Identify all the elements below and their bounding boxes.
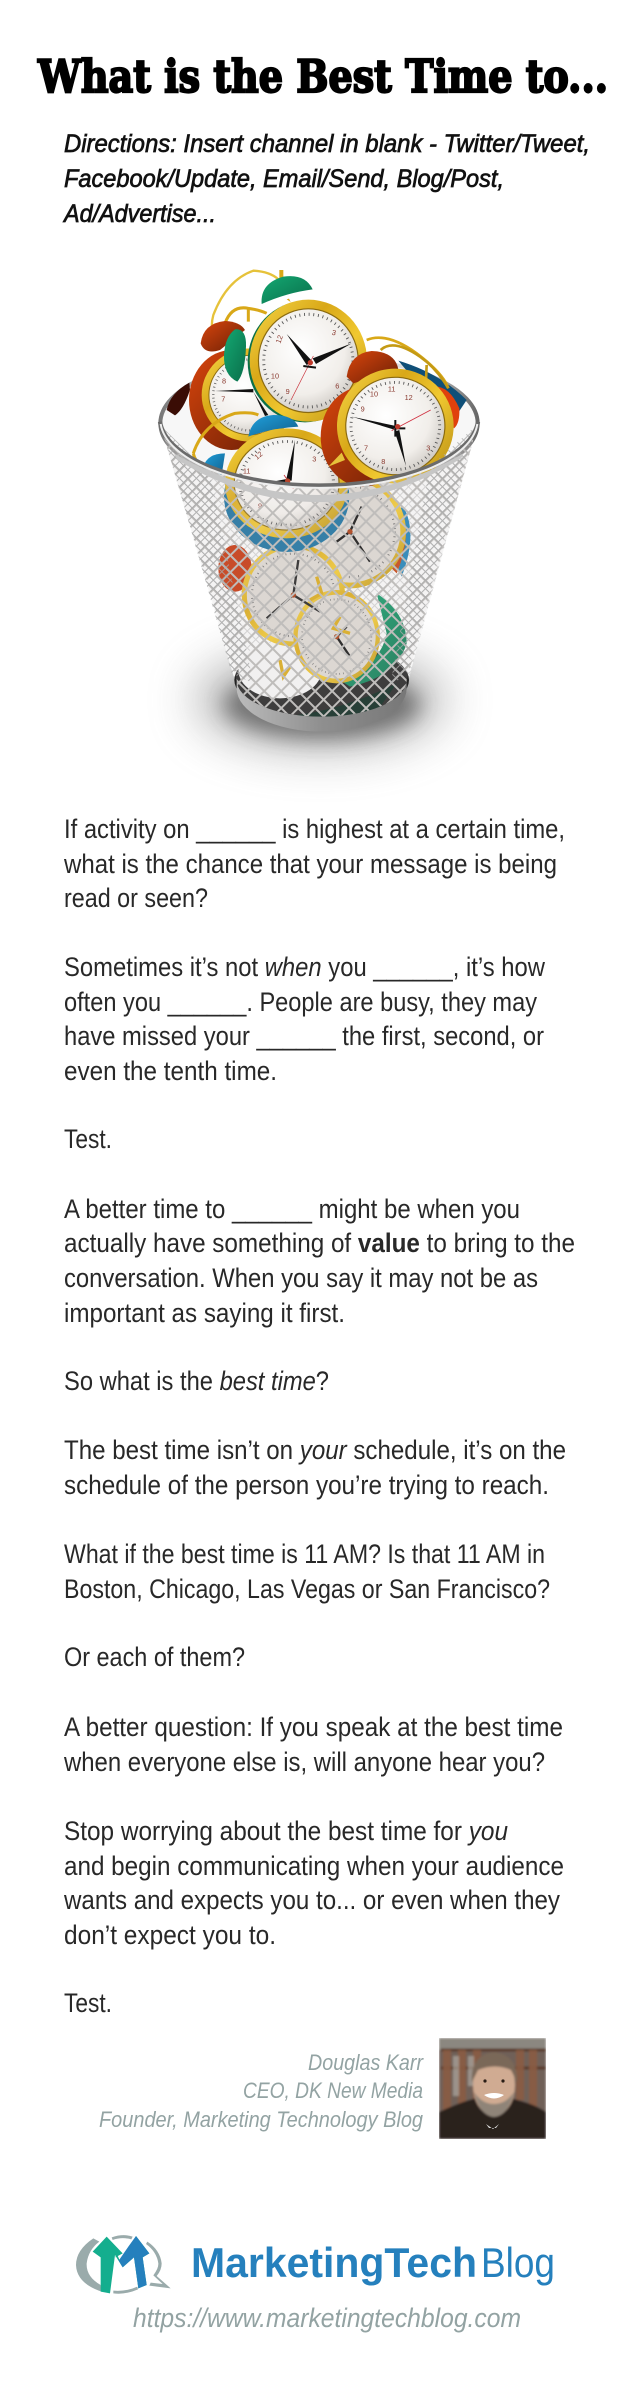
body copy: [63, 814, 575, 2018]
paragraph: how often: even the tenth time.: [64, 1056, 277, 1086]
paragraph: better time: actually have something of value to bring to the: [64, 1228, 575, 1258]
basket interior: [159, 359, 478, 730]
right clock: 8: [381, 457, 385, 466]
paragraph: stop worrying: wants and expects you to... or even when they: [63, 1885, 560, 1915]
logo: [76, 2235, 555, 2294]
logo wordmark: MarketingTech: [191, 2239, 477, 2286]
front clock inside basket: [193, 413, 349, 552]
top clock: 10: [271, 371, 279, 380]
dark brown bell: [167, 383, 190, 415]
paragraph: better question: when everyone else is, will anyone hear you?: [63, 1747, 545, 1777]
right clock: [321, 338, 461, 491]
paragraph: how often: often you ______. People are busy, they may: [64, 987, 537, 1017]
right clock: 9: [361, 405, 365, 414]
front rim: [160, 422, 478, 502]
right clock: 11: [388, 385, 395, 394]
front clock inside basket: 12: [252, 449, 264, 461]
left handles: [212, 271, 278, 346]
paragraph: 11 AM: Boston, Chicago, Las Vegas or San Francisco?: [64, 1574, 550, 1604]
author credit: Founder, Marketing Technology Blog: [99, 2107, 424, 2132]
basket floor: [234, 643, 409, 717]
front clock inside basket: 3: [312, 455, 316, 464]
right clock: 3: [426, 444, 430, 453]
paragraph: better question: A better question: If you speak at the best time: [64, 1712, 563, 1742]
question: each of them: Or each of them?: [64, 1642, 245, 1672]
test: Test.: [64, 1124, 112, 1154]
directions text: [62, 130, 590, 228]
paragraph: better question: [63, 1712, 563, 1777]
right clock: 12: [405, 393, 413, 402]
author credit: [99, 2050, 424, 2132]
directions text: Directions: Insert channel in blank - Twitter/Tweet,: [64, 130, 590, 158]
paragraph: stop worrying: and begin communicating when your audience: [64, 1851, 564, 1881]
paragraph: better time: important as saying it first.: [64, 1298, 345, 1328]
paragraph: how often: Sometimes it’s not when you ______, it’s how: [64, 952, 545, 982]
test: Test.: [64, 1988, 112, 2018]
paragraph: activity: If activity on ______ is highest at a certain time,: [64, 814, 565, 844]
author credit: CEO, DK New Media: [243, 2078, 423, 2103]
left clock: 7: [221, 395, 225, 404]
top clock: [248, 270, 367, 422]
question: best time: So what is the best time?: [64, 1366, 329, 1396]
floor shadow: [195, 650, 445, 750]
paragraph: schedule: [64, 1435, 566, 1500]
paragraph: schedule: schedule of the person you’re trying to reach.: [64, 1470, 549, 1500]
paragraph: schedule: The best time isn’t on your schedule, it’s on the: [64, 1435, 566, 1465]
red bell and green bell: [201, 321, 245, 351]
top clock: 9: [286, 387, 290, 396]
paragraph: stop worrying: Stop worrying about the best time for you: [64, 1816, 508, 1846]
top clock: 3: [331, 328, 337, 337]
paragraph: better time: [64, 1194, 575, 1328]
front clock inside basket: 11: [243, 466, 250, 475]
illustration: alarm clocks in a wire wastebasket: [159, 270, 478, 750]
blue bell: [248, 415, 298, 437]
directions text: Facebook/Update, Email/Send, Blog/Post,: [64, 165, 504, 193]
back rim: [160, 357, 478, 490]
lower clocks seen through mesh: [218, 475, 410, 687]
paragraph: 11 AM: [64, 1539, 550, 1604]
paragraph: 11 AM: What if the best time is 11 AM? Is that 11 AM in: [64, 1539, 545, 1569]
front clock inside basket: 9: [258, 501, 262, 510]
paragraph: better time: conversation. When you say it may not be as: [64, 1263, 538, 1293]
paragraph: better time: A better time to ______ might be when you: [64, 1194, 520, 1224]
website url: https://www.marketingtechblog.com: [133, 2303, 521, 2333]
front mesh: [159, 422, 478, 717]
paragraph: activity: read or seen?: [64, 883, 208, 913]
top clock: 12: [274, 334, 285, 345]
logo mark: speech bubble with arrows: [76, 2235, 171, 2294]
dark blue clock body: [398, 361, 467, 415]
top clock: 6: [335, 381, 339, 390]
logo: Blog: [481, 2239, 555, 2286]
right clock: 7: [364, 444, 368, 453]
left clock: [189, 321, 298, 450]
author photo: [439, 2038, 546, 2139]
right clock: 10: [370, 390, 378, 399]
author credit: Douglas Karr: [308, 2050, 424, 2075]
left clock: 8: [222, 376, 226, 385]
paragraph: how often: [64, 952, 545, 1086]
base band: [237, 680, 407, 732]
directions text: Ad/Advertise...: [62, 200, 216, 228]
paragraph: stop worrying: don’t expect you to.: [64, 1920, 276, 1950]
paragraph: activity: [63, 814, 565, 913]
paragraph: activity: what is the chance that your message is being: [63, 849, 557, 879]
paragraph: stop worrying: [63, 1816, 564, 1950]
paragraph: how often: have missed your ______ the first, second, or: [64, 1021, 544, 1051]
